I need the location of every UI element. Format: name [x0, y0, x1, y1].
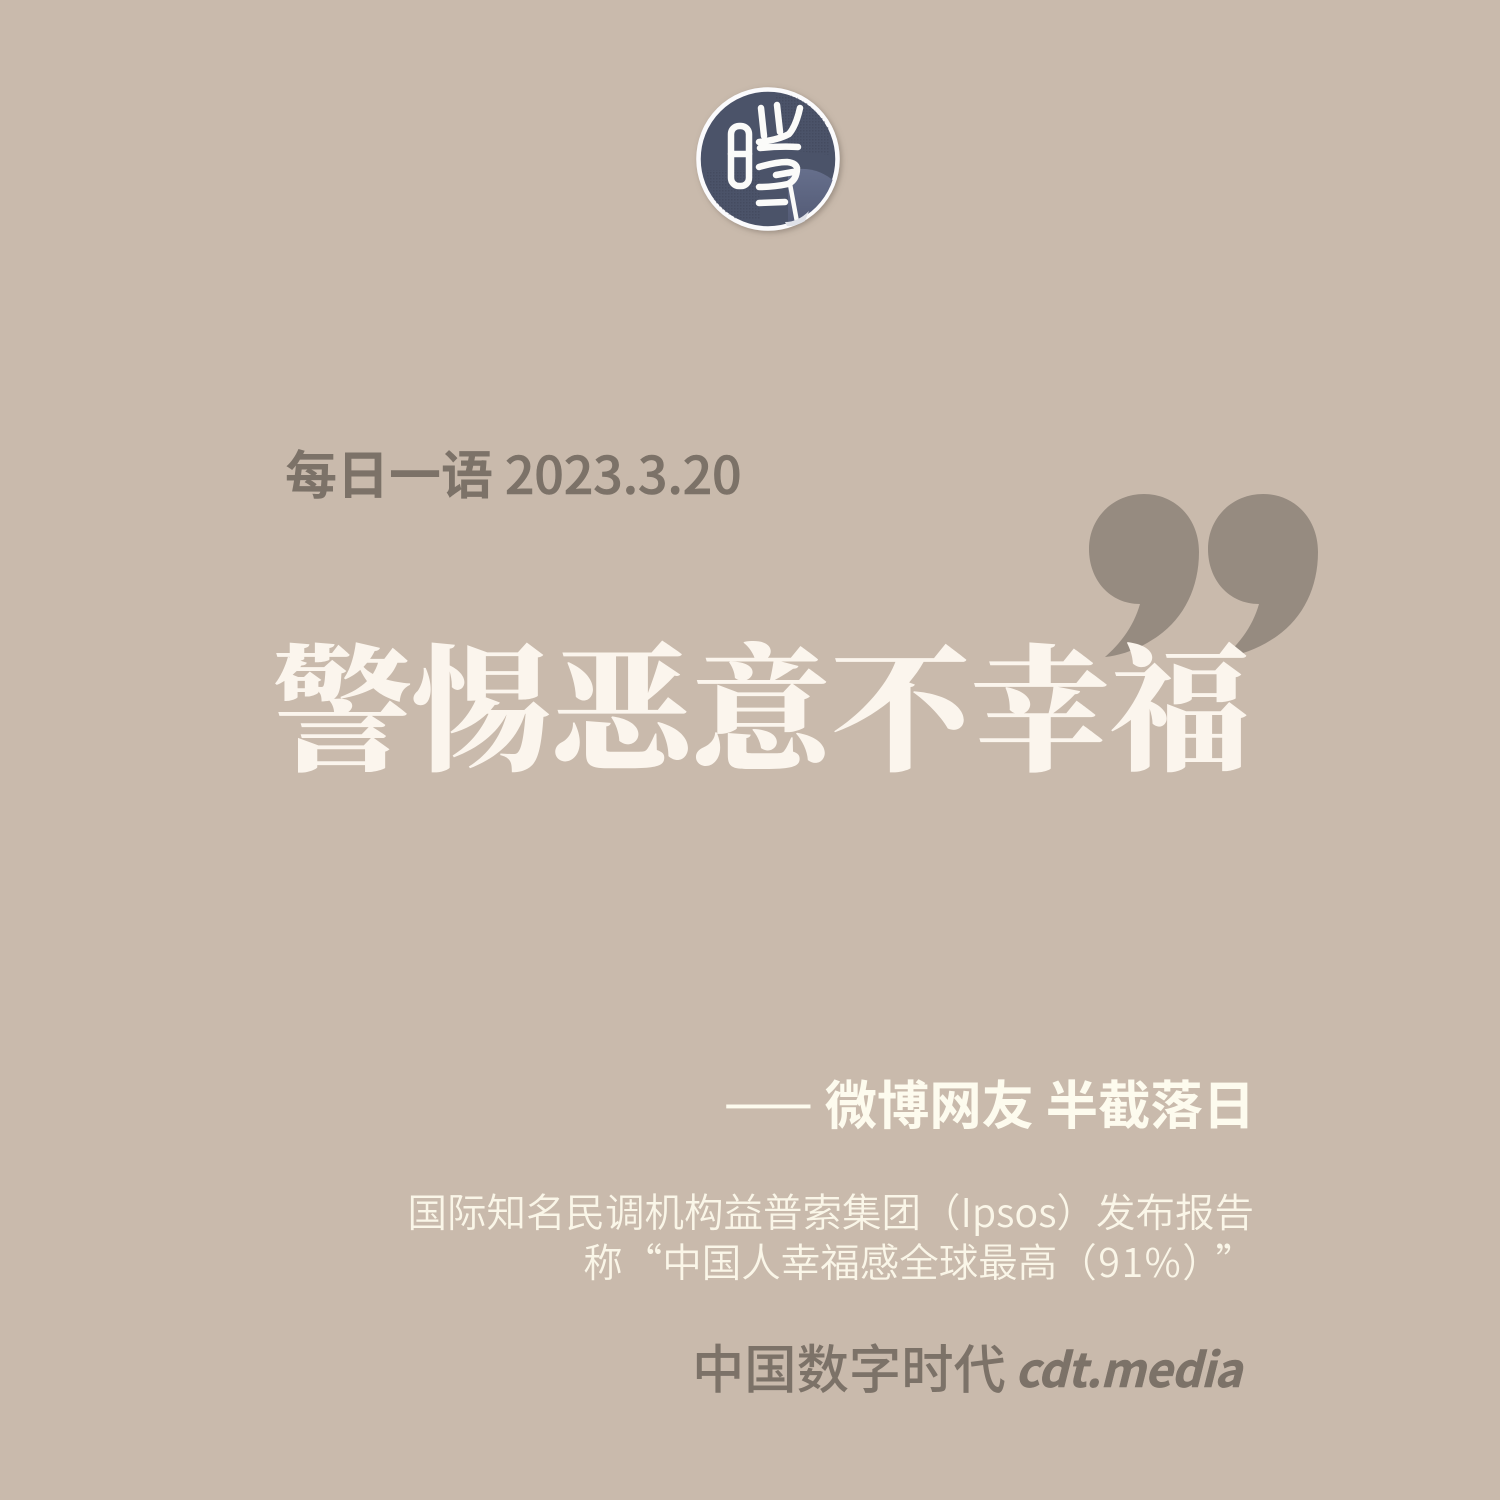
date heading: 每日一语 2023.3.20 [285, 434, 742, 509]
attribution: —— 微博网友 半截落日 [724, 1064, 1255, 1140]
footer brand: 中国数字时代 [692, 1328, 1006, 1404]
description text [408, 1182, 1255, 1289]
description text: 国际知名民调机构益普索集团（Ipsos）发布报告 [408, 1182, 1254, 1239]
description text: 称“中国人幸福感全球最高（91%） ” [583, 1232, 1255, 1289]
footer url: cdt.media [1015, 1332, 1241, 1401]
icon: seal logo [696, 87, 844, 236]
main title: 警惕恶意不幸福 [272, 602, 1250, 799]
icon: closing quotation mark [1089, 494, 1318, 657]
